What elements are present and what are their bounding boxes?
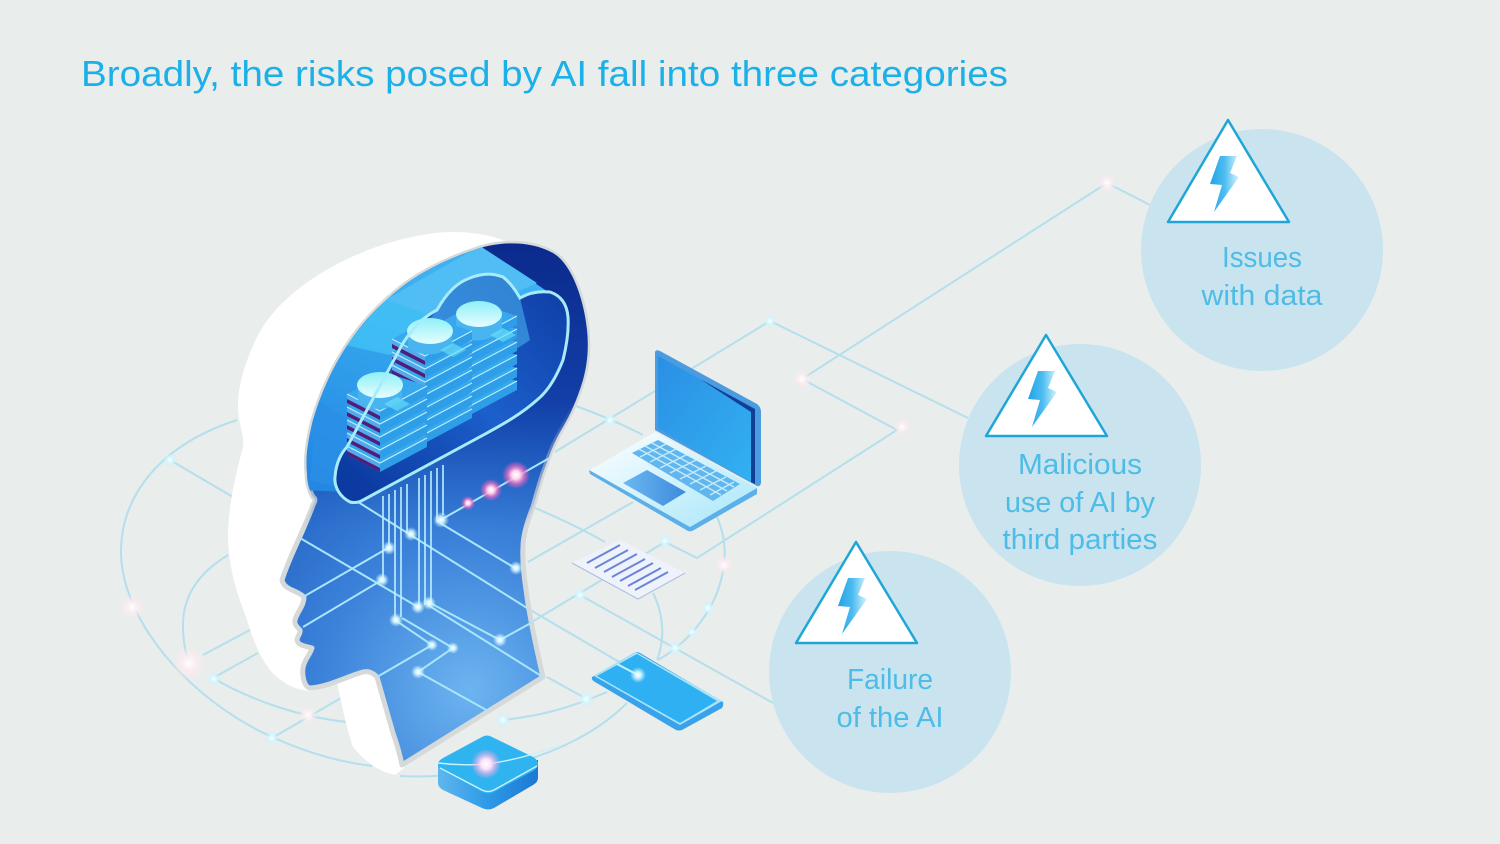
cloud with server stacks bbox=[335, 274, 568, 503]
phone bbox=[592, 652, 723, 730]
upper brain band bbox=[306, 243, 588, 524]
cloud outline bbox=[335, 274, 568, 503]
glowing nodes bbox=[119, 173, 1117, 745]
head: blue face and brain bbox=[282, 240, 600, 765]
category: failure of the AI bbox=[769, 542, 1011, 793]
circuit wires inside the face bbox=[300, 452, 560, 712]
category: issues with data bbox=[1141, 120, 1383, 371]
category: malicious use of AI by third parties bbox=[959, 335, 1201, 586]
category: malicious use of AI by third parties: third parties bbox=[1002, 524, 1158, 556]
category: malicious use of AI by third parties: Malicious bbox=[1018, 449, 1142, 481]
stack highlights bbox=[384, 328, 516, 411]
category: failure of the AI: of the AI bbox=[836, 702, 944, 734]
server stack right bbox=[437, 301, 517, 415]
server stack left bbox=[347, 372, 427, 472]
head: white back of the silhouette bbox=[228, 232, 510, 775]
laptop bbox=[589, 350, 761, 531]
category: issues with data: Issues bbox=[1222, 242, 1302, 274]
network lines outside the head bbox=[121, 183, 1152, 776]
document sheet bbox=[572, 540, 685, 599]
server stack middle bbox=[392, 318, 472, 443]
category: failure of the AI: Failure bbox=[847, 664, 933, 696]
icon: bottom device cube bbox=[438, 736, 560, 810]
title: Broadly, the risks posed by AI fall into three categories bbox=[81, 53, 1008, 94]
category: malicious use of AI by third parties: use of AI by bbox=[1005, 487, 1155, 519]
category: issues with data: with data bbox=[1200, 280, 1323, 312]
